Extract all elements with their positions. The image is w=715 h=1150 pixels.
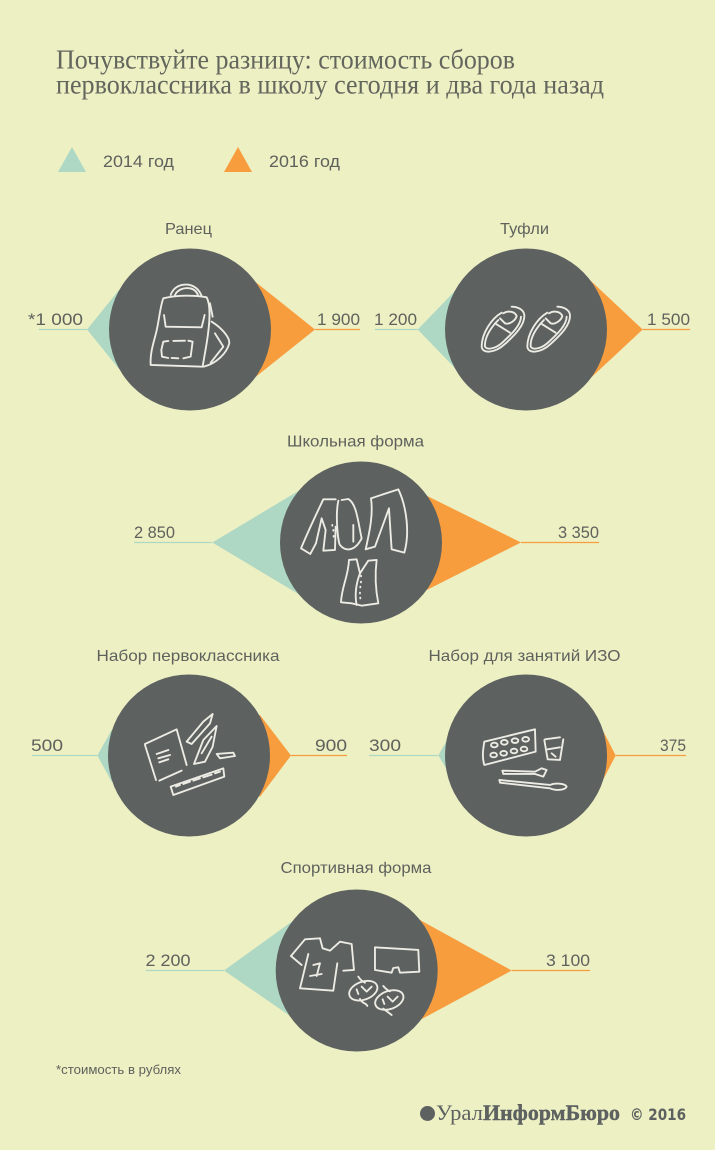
triangle 2014: art kit xyxy=(438,742,526,768)
value 2016: shoes: 1 500 xyxy=(647,310,690,329)
triangle 2014: shoes xyxy=(418,284,526,375)
triangle 2016: art kit xyxy=(526,733,616,778)
triangle 2016: school uniform xyxy=(361,496,521,590)
value line 2016: school uniform xyxy=(521,542,599,544)
legend: 2016 xyxy=(224,147,340,172)
value 2014: shoes: 1 200 xyxy=(374,310,417,329)
legend xyxy=(58,147,340,172)
value 2016: sports uniform: 3 100 xyxy=(546,951,590,970)
triangle 2016: first-grader kit xyxy=(189,715,291,797)
value 2016: art kit: 375 xyxy=(660,736,686,755)
heading: art kit: Набор для занятий ИЗО xyxy=(428,648,620,665)
circle: sports uniform xyxy=(276,890,438,1052)
value line 2014: shoes xyxy=(375,328,418,330)
value 2014: sports uniform: 2 200 xyxy=(146,951,190,970)
triangle 2016: backpack xyxy=(190,280,315,379)
panel: sports uniform xyxy=(146,860,590,1052)
heading: first-grader kit: Набор первоклассника xyxy=(96,648,280,665)
value line 2016: sports uniform xyxy=(512,970,590,972)
value line 2014: sports uniform xyxy=(146,970,224,972)
logo: UralInformBuro: ИнформБюро xyxy=(483,1100,620,1125)
icon part: left shoe xyxy=(482,307,524,352)
value 2016: first-grader kit: 900 xyxy=(315,736,347,755)
logo: UralInformBuro xyxy=(420,1100,620,1125)
icon: art kit xyxy=(483,729,567,790)
panel: backpack xyxy=(28,221,360,410)
circle: school uniform xyxy=(280,462,442,624)
triangle 2014: sports uniform xyxy=(224,921,357,1018)
heading: shoes: Туфли xyxy=(500,221,549,238)
panel: shoes xyxy=(374,221,690,410)
footnote: *стоимость в рублях xyxy=(56,1063,182,1077)
title: Почувствуйте разницу: стоимость сборов xyxy=(56,44,515,74)
value line 2014: art kit xyxy=(369,754,438,756)
circle: shoes xyxy=(445,248,607,410)
icon: shoes xyxy=(482,307,570,352)
value line 2014: first-grader kit xyxy=(32,754,97,756)
circle: first-grader kit xyxy=(108,674,270,836)
legend: 2016: 2016 год xyxy=(269,152,340,171)
heading: sports uniform: Спортивная форма xyxy=(280,860,432,877)
value 2014: art kit: 300 xyxy=(369,736,401,755)
icon: school uniform xyxy=(301,489,407,606)
value 2014: backpack: *1 000 xyxy=(28,310,83,329)
triangle 2016: shoes xyxy=(526,281,643,378)
value line 2016: first-grader kit xyxy=(291,754,347,756)
triangle 2016: sports uniform xyxy=(357,920,512,1020)
value line 2014: school uniform xyxy=(134,542,212,544)
triangle 2014: school uniform xyxy=(212,490,361,595)
value 2014: school uniform: 2 850 xyxy=(134,523,175,542)
legend: 2014 xyxy=(58,147,174,172)
value line 2016: shoes xyxy=(643,328,690,330)
value 2016: backpack: 1 900 xyxy=(317,310,360,329)
panel: school uniform xyxy=(134,434,599,624)
logo: UralInformBuro: Урал xyxy=(436,1100,483,1125)
icon: first-grader kit xyxy=(145,714,235,795)
icon: backpack xyxy=(151,285,229,367)
panel: art kit xyxy=(369,648,686,836)
title xyxy=(56,44,604,100)
title: первоклассника в школу сегодня и два года назад xyxy=(56,68,604,100)
circle: art kit xyxy=(445,674,607,836)
triangle 2014: backpack xyxy=(87,290,190,369)
value line 2016: art kit xyxy=(616,754,686,756)
heading: backpack: Ранец xyxy=(165,221,212,238)
icon part: right shoe xyxy=(527,307,570,352)
copyright: © 2016 xyxy=(630,1105,686,1124)
value 2016: school uniform: 3 350 xyxy=(558,523,599,542)
panel: first-grader kit xyxy=(31,648,347,836)
value line 2016: backpack xyxy=(315,328,360,330)
legend: 2014: 2014 год xyxy=(103,152,174,171)
value line 2014: backpack xyxy=(39,328,87,330)
triangle 2014: first-grader kit xyxy=(97,730,189,782)
icon: sports uniform xyxy=(291,938,419,1015)
circle: backpack xyxy=(109,248,271,410)
value 2014: first-grader kit: 500 xyxy=(31,736,63,755)
heading: school uniform: Школьная форма xyxy=(287,434,424,450)
